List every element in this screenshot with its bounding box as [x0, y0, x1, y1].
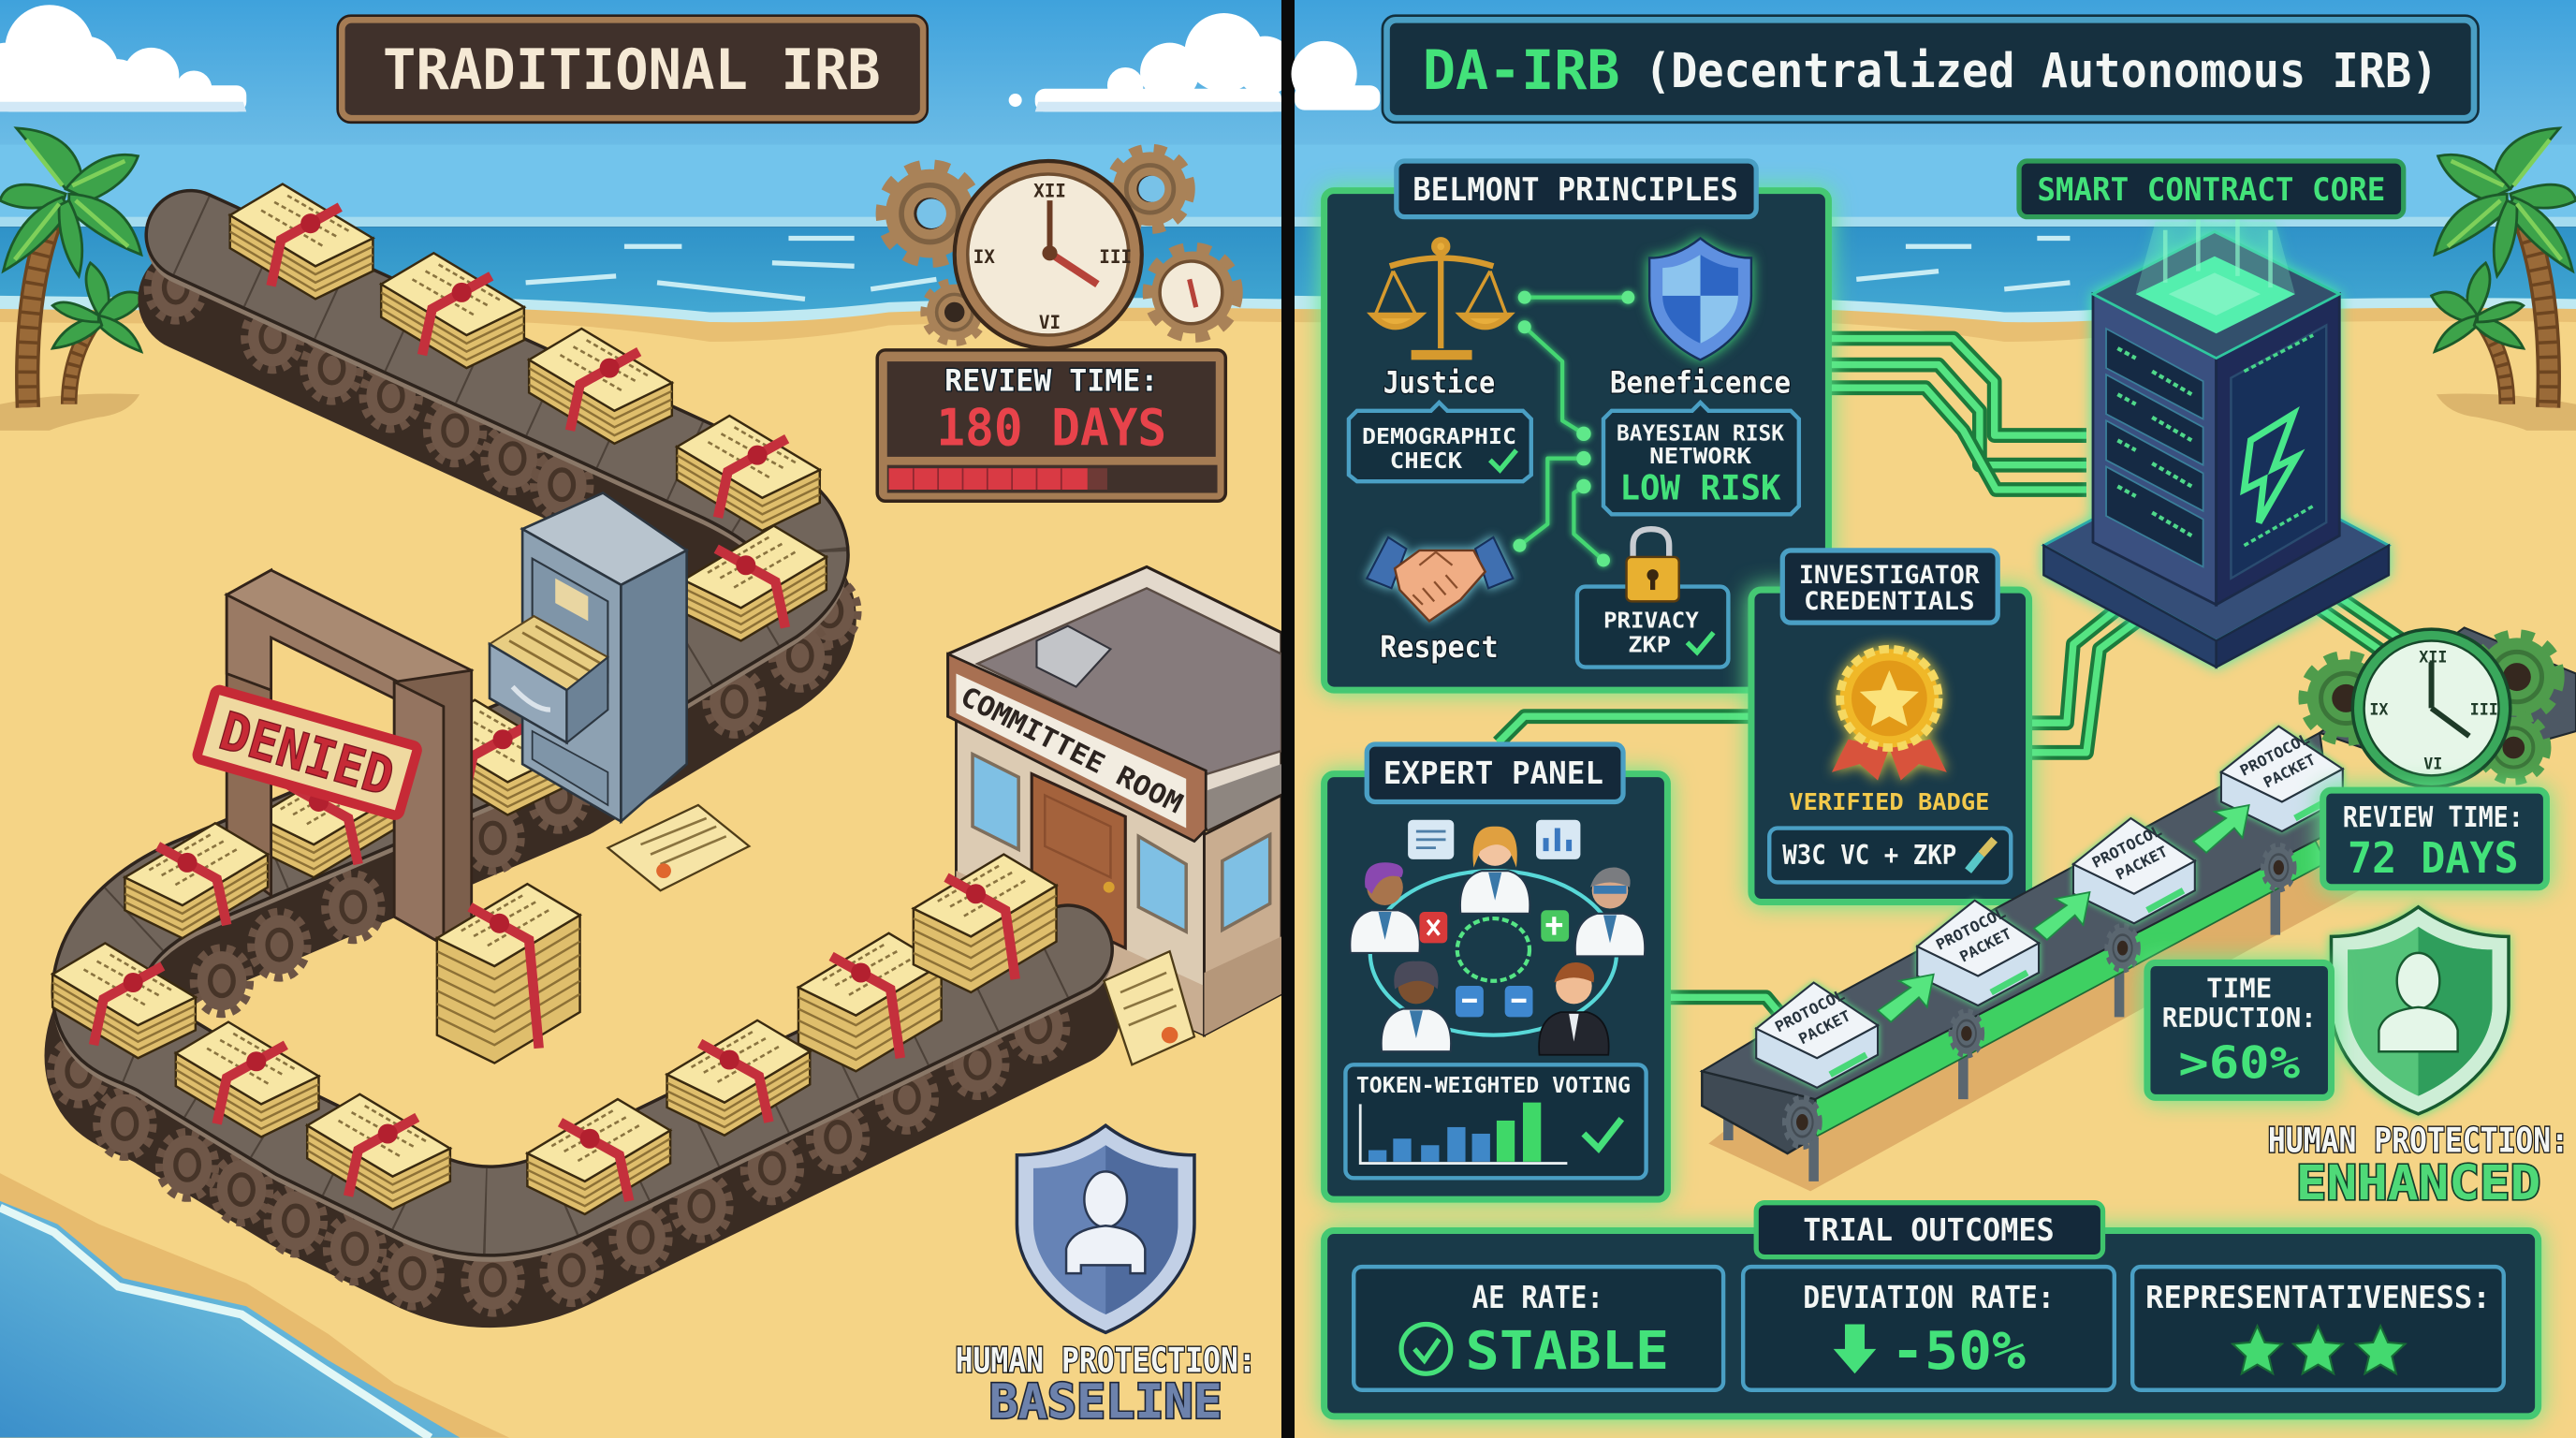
fast clock with gears: IX [2369, 700, 2388, 718]
title: DA-IRB [1383, 16, 2479, 123]
icon: respect handshake [1367, 537, 1513, 621]
background: sky [0, 0, 1281, 148]
expert header: EXPERT PANEL [1383, 755, 1603, 791]
right sand [1295, 370, 2576, 1438]
progress bar [887, 465, 1218, 493]
slow clock with gears: VI [1039, 312, 1061, 333]
wave lines [526, 238, 936, 299]
bayesian risk box [1603, 403, 1799, 514]
internal circuit lines [1513, 291, 1634, 566]
demographic check box: DEMOGRAPHIC [1362, 425, 1516, 449]
committee room building [948, 566, 1281, 1035]
review time 72 days panel: REVIEW TIME: [2343, 801, 2524, 834]
slow clock with gears: XII [1033, 181, 1066, 202]
tall free-standing paper stack [437, 884, 580, 1064]
icon: privacy lock [1627, 529, 1679, 601]
center divider [1281, 0, 1295, 1438]
right wave lines [1856, 238, 2070, 289]
demographic check box [1349, 403, 1531, 481]
server racks [2106, 329, 2203, 566]
fast clock with gears: III [2470, 700, 2498, 718]
time reduction panel: TIME [2206, 973, 2272, 1004]
trial outcomes header [1756, 1203, 2103, 1257]
panel: DA-IRB scene [1292, 0, 2576, 1438]
enhanced shield [2331, 907, 2509, 1114]
protocol packets: PROTOCOL [2237, 729, 2312, 780]
cloud left [0, 5, 246, 111]
shore foam [0, 1208, 431, 1438]
bayesian risk box: BAYESIAN RISK [1617, 421, 1784, 446]
human protection baseline label: BASELINE [989, 1375, 1222, 1431]
file cabinet [490, 493, 687, 822]
smart contract core label: SMART CONTRACT CORE [2037, 171, 2385, 209]
title: DA-IRB: DA-IRB [1423, 38, 1620, 102]
time reduction panel: REDUCTION: [2162, 1003, 2317, 1034]
review time 72 days panel [2323, 790, 2546, 888]
belmont header: BELMONT PRINCIPLES [1412, 171, 1738, 209]
expert header [1367, 744, 1623, 801]
human protection baseline label [956, 1340, 1256, 1431]
icon: justice scales [1373, 240, 1508, 355]
windows [973, 755, 1270, 932]
protocol packets: PACKET [2261, 750, 2319, 791]
protocol packets: PROTOCOL [2089, 821, 2164, 872]
review time panel [877, 350, 1225, 501]
loose paper on sand [607, 805, 749, 890]
conveyor side band [97, 299, 1068, 1275]
demographic check box: CHECK [1390, 449, 1462, 474]
time reduction panel: >60% [2178, 1037, 2301, 1089]
vote bar chart [1360, 1103, 1567, 1164]
protocol packets: PROTOCOL [1772, 986, 1848, 1035]
panel: investigator credentials [1751, 550, 2029, 902]
denied stamp sign: DENIED [212, 701, 401, 809]
door [1032, 774, 1125, 948]
cell: deviation rate: -50% [1891, 1321, 2026, 1382]
right horizon strip [1295, 217, 2576, 227]
w3c box [1769, 829, 2011, 882]
data connectors [1499, 339, 2415, 1027]
protocol packets: PROTOCOL [1933, 903, 2009, 954]
right palm trees [2432, 128, 2576, 431]
smart contract core label [2019, 161, 2404, 217]
flow arrows [1878, 805, 2249, 1022]
panel: belmont principles [1325, 161, 1828, 690]
conveyor gears [51, 255, 1066, 1313]
token weighted voting box [1345, 1064, 1647, 1178]
bayesian risk box: LOW RISK [1620, 468, 1781, 508]
AC unit [1036, 626, 1110, 687]
w3c box: W3C VC + ZKP [1782, 840, 1956, 871]
cell: AE rate: STABLE [1466, 1321, 1669, 1382]
background: horizon strip [0, 217, 1281, 227]
paper falling at belt end [1104, 951, 1194, 1064]
right sky [1295, 0, 2576, 148]
fast green conveyor [1702, 733, 2333, 1153]
human protection enhanced label: ENHANCED [2296, 1156, 2540, 1211]
right ocean [1295, 227, 2576, 329]
speech bubbles [1408, 820, 1580, 859]
right shoreline [1295, 296, 2576, 378]
slow clock with gears [884, 151, 1236, 348]
panel: trial outcomes [1325, 1203, 2539, 1416]
icon: verified gold badge [1832, 649, 1947, 781]
right shallow sea band [1295, 144, 2576, 218]
paper stacks on top belt [230, 184, 827, 640]
background: shoreline [0, 296, 1281, 378]
justice label: Justice [1383, 366, 1495, 400]
title: traditional IRB [338, 16, 928, 123]
committee room sign: COMMITTEE ROOM [956, 680, 1188, 819]
gate arch [227, 570, 472, 945]
investigator header: CREDENTIALS [1804, 588, 1975, 616]
background: shallow sea band [0, 144, 1281, 218]
cell: deviation rate: DEVIATION RATE: [1803, 1279, 2055, 1315]
time reduction panel [2147, 962, 2331, 1097]
palm trees [0, 128, 144, 431]
vote tokens [1419, 910, 1569, 1017]
respect label: Respect [1380, 631, 1499, 665]
background: ocean [0, 227, 1281, 329]
expert avatars [1350, 827, 1645, 1055]
right cloud [1292, 41, 1380, 110]
privacy zkp box [1577, 587, 1728, 668]
human protection enhanced label [2268, 1120, 2569, 1211]
cloud right [1009, 13, 1295, 111]
protocol packets: PACKET [1956, 924, 2014, 966]
bayesian risk box: NETWORK [1649, 445, 1751, 469]
verified badge label: VERIFIED BADGE [1789, 788, 1989, 815]
committee room sign [948, 654, 1206, 842]
fast clock with gears: VI [2423, 755, 2442, 772]
cell: representativeness: REPRESENTATIVENESS: [2145, 1279, 2491, 1315]
title: traditional IRB: TRADITIONAL IRB [383, 38, 881, 103]
voting ring [1370, 871, 1617, 1035]
conveyor behind clock [2320, 627, 2576, 772]
investigator header [1782, 550, 1998, 623]
cell: deviation rate [1743, 1267, 2115, 1390]
beneficence label: Beneficence [1610, 366, 1791, 400]
privacy zkp box: PRIVACY [1603, 609, 1699, 633]
panel: expert panel [1325, 744, 1667, 1199]
review time 72 days panel: 72 DAYS [2348, 833, 2519, 883]
contract panel glyph [2231, 325, 2326, 579]
shadow under review conveyor [1708, 822, 2359, 1191]
slow clock with gears: IX [973, 246, 995, 268]
human protection baseline label: HUMAN PROTECTION: [956, 1340, 1256, 1380]
paper stacks behind gate [256, 700, 565, 877]
paper stacks lower belt [52, 823, 1057, 1214]
conveyor belt surface [97, 235, 1068, 1218]
bottom left water [0, 1201, 460, 1438]
cell: AE rate [1354, 1267, 1723, 1390]
panel: traditional IRB beach scene [0, 0, 1295, 1438]
trial outcomes header: TRIAL OUTCOMES [1803, 1211, 2055, 1248]
protocol packets [1756, 726, 2343, 1088]
baseline shield [1017, 1125, 1194, 1332]
privacy zkp box: ZKP [1628, 634, 1671, 658]
icon: beneficence shield [1649, 238, 1751, 360]
background: sand [0, 370, 1281, 1438]
review time panel: REVIEW TIME: [944, 365, 1158, 399]
smart contract server tower [2043, 213, 2389, 668]
fast clock with gears [2305, 629, 2557, 787]
light beams [2136, 213, 2295, 333]
belmont header [1397, 161, 1756, 217]
investigator header: INVESTIGATOR [1799, 562, 1980, 590]
protocol packets: PACKET [1795, 1006, 1853, 1048]
review time panel: 180 DAYS [936, 399, 1166, 458]
fast clock with gears: XII [2419, 648, 2447, 666]
title: DA-IRB: (Decentralized Autonomous IRB) [1645, 44, 2438, 99]
token weighted voting box: TOKEN-WEIGHTED VOTING [1356, 1074, 1631, 1098]
slow clock with gears: III [1099, 246, 1132, 268]
cell: representativeness [2132, 1267, 2504, 1390]
protocol packets: PACKET [2113, 843, 2171, 884]
review conveyor legs [1728, 888, 2276, 1181]
bottom left shore sand [0, 1173, 509, 1438]
cell: AE rate: AE RATE: [1472, 1279, 1603, 1315]
